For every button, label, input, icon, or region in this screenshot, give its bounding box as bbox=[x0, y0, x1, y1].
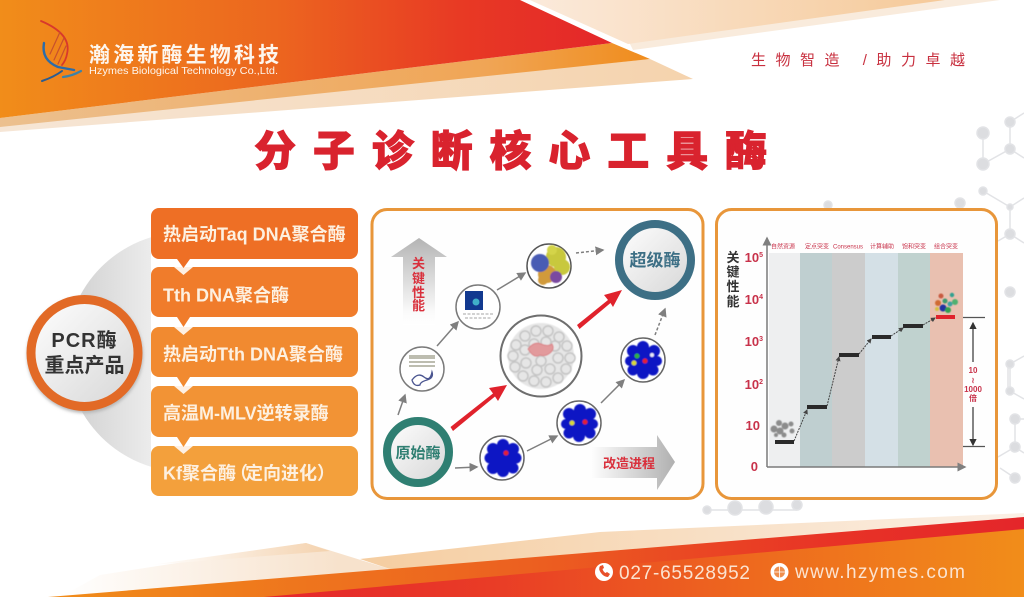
icon: phone bbox=[595, 563, 613, 581]
node: heat map bbox=[456, 285, 500, 329]
y axis labels: 10 bbox=[745, 292, 759, 307]
y axis title: 键 bbox=[726, 264, 740, 280]
product list: 热启动Taq DNA聚合酶 bbox=[163, 224, 346, 244]
product list: Kf聚合酶（定向进化） bbox=[163, 462, 335, 484]
y axis labels: 10 bbox=[745, 250, 759, 265]
panel: enzyme engineering bbox=[372, 210, 703, 498]
fold-change bracket bbox=[963, 318, 985, 446]
slogan: 生物智造 /助力卓越 bbox=[751, 51, 965, 69]
contact: website: www.hzymes.com bbox=[794, 562, 965, 583]
bottom banner bbox=[48, 513, 1024, 597]
y axis labels: 2 bbox=[759, 379, 763, 386]
band headings bbox=[771, 242, 958, 250]
arrow: key performance bbox=[391, 238, 447, 325]
PCR hub circle bbox=[27, 297, 143, 413]
company name bbox=[89, 43, 279, 77]
band headings: 组合突变 bbox=[934, 242, 958, 250]
y axis labels: 4 bbox=[759, 294, 763, 301]
node: original enzyme: 原始酶 bbox=[395, 444, 441, 462]
product list: 高温M-MLV逆转录酶 bbox=[163, 402, 329, 424]
band headings: 定点突变 bbox=[805, 242, 829, 250]
y axis labels bbox=[745, 250, 763, 474]
fold-change bracket: 倍 bbox=[969, 393, 977, 403]
node: blue protein 2 bbox=[557, 401, 601, 445]
title: 分子诊断核心工具酶 bbox=[254, 128, 767, 175]
y axis labels: 0 bbox=[751, 459, 758, 474]
arrow: key performance: 键 bbox=[412, 271, 425, 286]
node: original enzyme bbox=[387, 421, 449, 483]
icon: gray protein bbox=[770, 420, 794, 438]
product list bbox=[151, 208, 358, 496]
y axis labels: 10 bbox=[745, 334, 759, 349]
company logo bbox=[41, 21, 279, 81]
band headings: 计算辅助 bbox=[870, 242, 894, 250]
panel: PCR enzyme products bbox=[27, 208, 358, 496]
chart bands bbox=[769, 253, 963, 467]
product list: 热启动Tth DNA聚合酶 bbox=[163, 344, 343, 364]
PCR hub circle: 重点产品 bbox=[44, 354, 124, 377]
icon: DNA sail bbox=[41, 21, 81, 81]
fold-change bracket: 1000 bbox=[964, 385, 982, 394]
fold-change bracket: 10 bbox=[969, 366, 978, 375]
arrow: key performance: 能 bbox=[412, 298, 425, 313]
arrow: engineering progress: 改造进程 bbox=[603, 456, 655, 471]
y axis title: 性 bbox=[726, 279, 740, 294]
top banner bbox=[0, 0, 1000, 132]
pathway arrows bbox=[398, 250, 665, 468]
product list: Tth DNA聚合酶 bbox=[163, 284, 289, 306]
step connectors bbox=[794, 318, 935, 441]
company name: 瀚海新酶生物科技 bbox=[89, 43, 279, 67]
band headings: 饱和突变 bbox=[902, 242, 926, 250]
node: blue protein 3 bbox=[621, 338, 665, 382]
icon: colored protein bbox=[935, 293, 958, 313]
y axis labels: 10 bbox=[745, 377, 759, 392]
icon: globe bbox=[770, 563, 788, 581]
red arrows bbox=[450, 290, 622, 431]
y axis title bbox=[726, 250, 740, 309]
gray disc bbox=[80, 238, 151, 466]
y axis labels: 10 bbox=[746, 418, 760, 433]
y axis labels: 3 bbox=[759, 336, 763, 343]
band headings: 自然资源 bbox=[771, 242, 795, 250]
arrow: key performance: 性 bbox=[412, 285, 425, 300]
node: central protein bbox=[500, 316, 582, 396]
node: blue protein 1 bbox=[480, 436, 524, 480]
fold-change bracket: ≀ bbox=[972, 376, 974, 385]
node: sequence bbox=[400, 347, 444, 391]
axes bbox=[767, 238, 965, 467]
contact: phone: 027-65528952 bbox=[619, 563, 750, 584]
y axis title: 关 bbox=[726, 250, 740, 265]
node: colored protein bbox=[527, 244, 571, 288]
step bars bbox=[775, 315, 955, 444]
PCR hub circle: PCR酶 bbox=[51, 329, 118, 352]
band headings: Consensus bbox=[833, 244, 863, 250]
node: super enzyme bbox=[619, 224, 691, 296]
y axis labels: 5 bbox=[759, 252, 763, 259]
arrow: key performance: 关 bbox=[412, 256, 425, 271]
node: super enzyme: 超级酶 bbox=[630, 250, 680, 270]
background molecule pattern bbox=[703, 113, 1024, 515]
y axis title: 能 bbox=[726, 294, 740, 309]
arrow: engineering progress bbox=[590, 435, 675, 490]
panel: performance step chart bbox=[716, 210, 996, 498]
company name: Hzymes Biological Technology Co.,Ltd. bbox=[89, 65, 278, 77]
